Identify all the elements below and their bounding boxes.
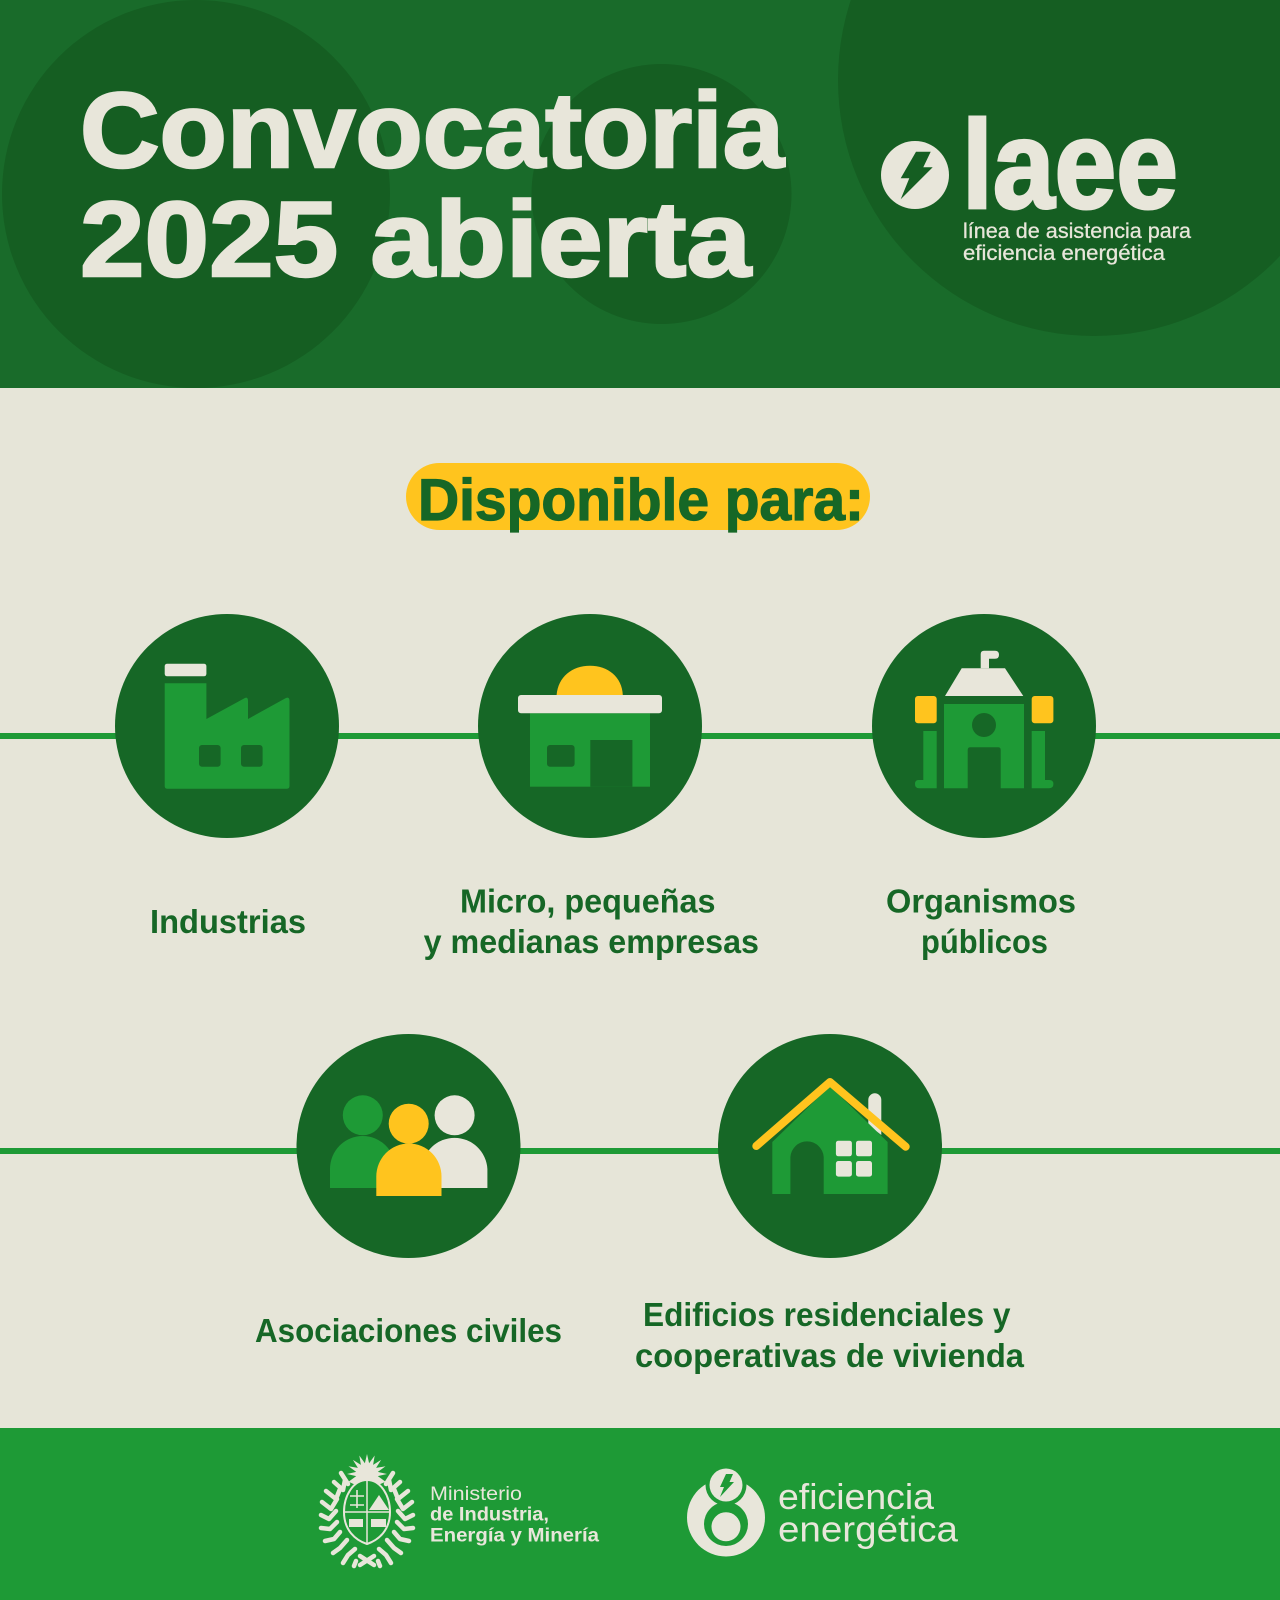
emblem: coat of arms: [321, 1454, 413, 1566]
icon: house: [756, 1082, 906, 1194]
item: Asociaciones civiles: [255, 1034, 562, 1349]
label: Organismos: [886, 882, 1076, 920]
label: Micro, pequeñas: [460, 882, 716, 920]
text: Ministerio: Energía y Minería: [430, 1526, 599, 1547]
logo: laee: [881, 96, 1191, 265]
logo: eficiencia energética: [687, 1464, 959, 1556]
connector lines: [0, 733, 1280, 1154]
icon: people: [330, 1095, 487, 1196]
label: Edificios residenciales y: [643, 1296, 1011, 1333]
label: [424, 882, 759, 960]
title: 2025 abierta: [80, 179, 753, 299]
logo tagline: eficiencia energética: [963, 242, 1165, 265]
header band: [0, 0, 1280, 388]
logo tagline: [963, 220, 1191, 265]
text: Ministerio: [430, 1484, 599, 1547]
title: [80, 70, 786, 299]
item: Edificios residenciales: [635, 1034, 1025, 1374]
label: Industrias: [150, 903, 306, 940]
label: Asociaciones civiles: [255, 1312, 562, 1349]
label: [635, 1296, 1025, 1374]
item: MiPyMEs: [424, 614, 759, 960]
label: y medianas empresas: [424, 923, 759, 960]
text: Ministerio: Ministerio: [430, 1484, 522, 1505]
wordmark: energética: [778, 1509, 959, 1550]
footer band: [0, 1428, 1280, 1600]
logo tagline: línea de asistencia para: [963, 220, 1191, 243]
wordmark: eficiencia: [778, 1476, 935, 1517]
label: [886, 882, 1076, 960]
item: Organismos públicos: [872, 614, 1096, 960]
title: Convocatoria: [80, 70, 786, 190]
icon: factory: [165, 664, 290, 789]
wordmark: [778, 1476, 959, 1550]
heading pill: Disponible para: Disponible para:: [418, 468, 864, 533]
icon: shop: [518, 666, 662, 787]
icon: public building: [915, 651, 1053, 788]
text: Ministerio: de Industria,: [430, 1505, 549, 1526]
label: públicos: [921, 923, 1048, 960]
icon: bolt circle: [881, 141, 949, 209]
logo wordmark: laee: [962, 96, 1178, 235]
item: Industrias: [115, 614, 339, 940]
label: cooperativas de vivienda: [635, 1337, 1025, 1374]
icon: ring and bolt: [687, 1464, 765, 1556]
